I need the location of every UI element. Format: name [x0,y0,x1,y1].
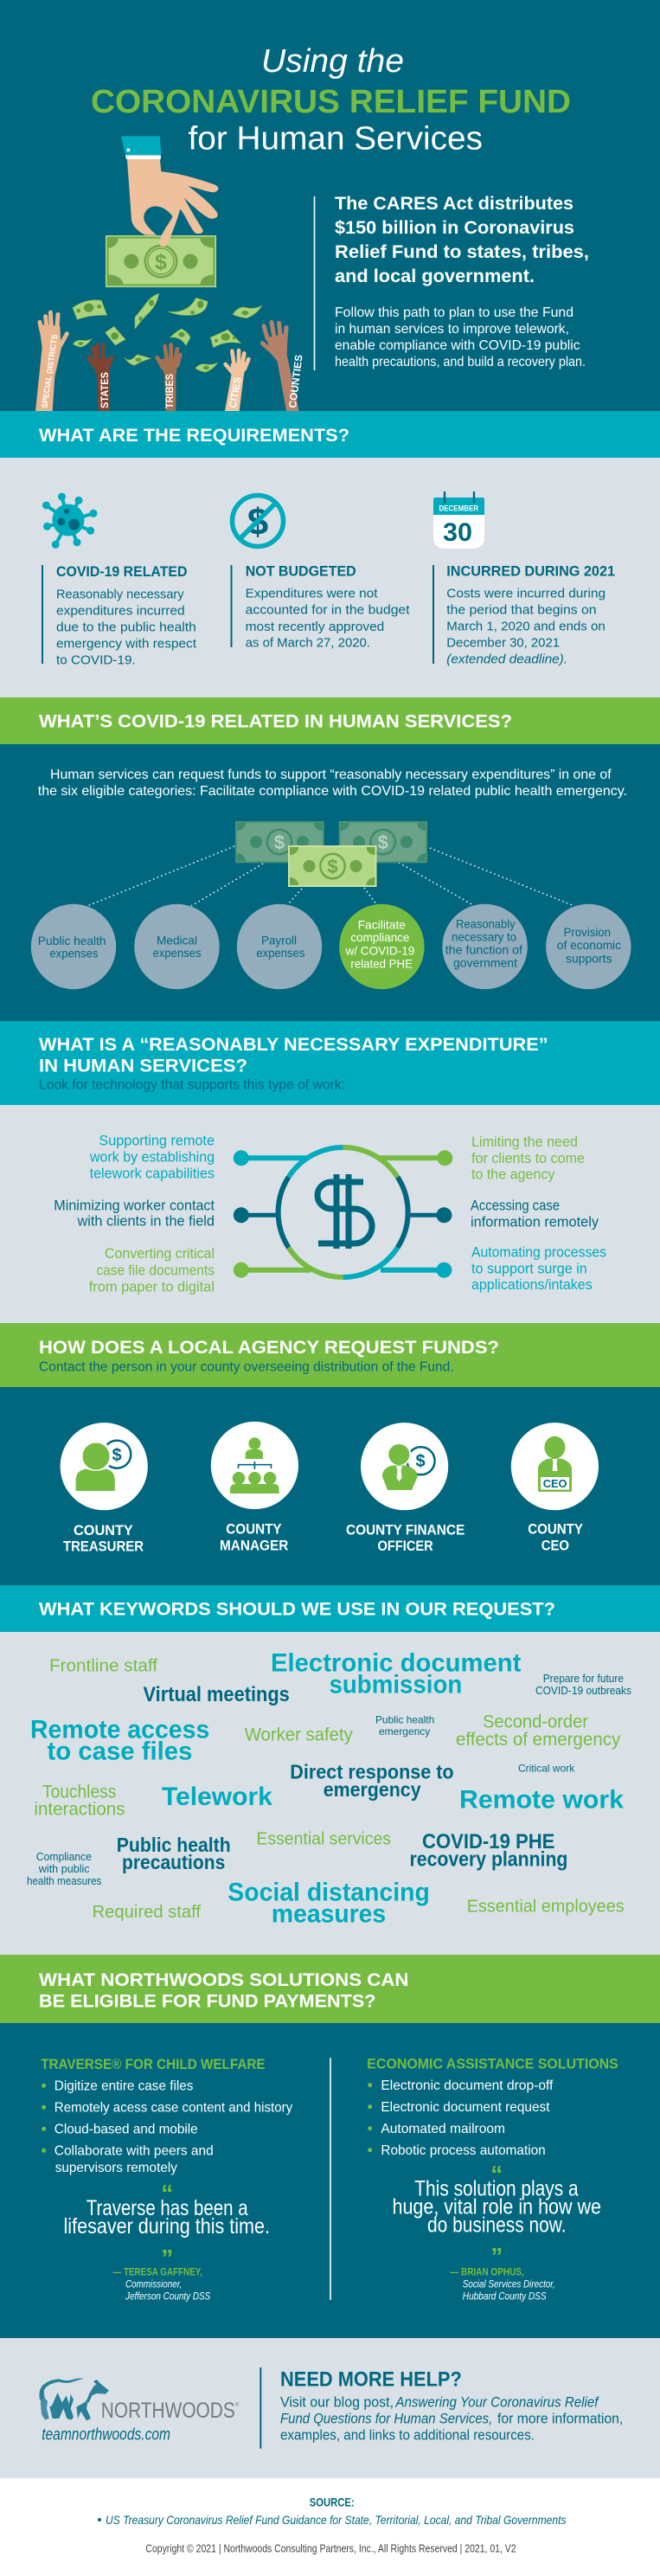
word cloud: Public health [375,1713,434,1725]
word cloud [27,1649,631,1929]
bill: center highlighted: $ [327,856,338,877]
title: CORONAVIRUS RELIEF FUND [91,84,571,120]
category: payroll expenses: Payroll [261,934,297,948]
requirement: covid-19 related: Reasonably necessary [56,588,184,602]
category: reasonably necessary: the function of [445,943,522,957]
icon: no dollar [232,495,284,547]
intro paragraph: Follow this path to plan to use the Fund [335,305,573,320]
word cloud: COVID-19 PHE [422,1830,554,1853]
icon: giving hand [121,136,218,247]
callout: need more help: for more information, [497,2411,623,2427]
hand: special districts [35,312,67,411]
intro paragraph: in human services to improve telework, [335,322,569,337]
quote: traverse: ” [161,2245,173,2271]
logo: northwoods: NORTHWOODS [101,2399,235,2423]
word cloud: Remote access [30,1715,209,1744]
hand: tribes: TRIBES [163,374,176,408]
word cloud: recovery planning [410,1848,567,1872]
icon: calendar: DECEMBER [439,504,478,513]
word cloud: COVID-19 outbreaks [535,1684,631,1697]
item: automating processes [471,1243,606,1293]
panel: hero [0,0,660,411]
category: reasonably necessary [442,904,528,989]
label: CEO [541,1538,569,1554]
callout: need more help: NEED MORE HELP? [280,2368,462,2392]
label: COUNTY [528,1521,584,1538]
requirement: incurred during 2021: INCURRED DURING 2021 [446,562,615,580]
word cloud: Second-order [483,1712,588,1732]
requirement: covid-19 related: due to the public health [56,620,196,635]
requirement: covid-19 related: COVID-19 RELATED [56,563,187,580]
category: reasonably necessary: necessary to [452,930,516,944]
hand: counties: COUNTIES [286,354,305,408]
bullet list: traverse: supervisors remotely [55,2161,177,2175]
word cloud: Worker safety [245,1725,353,1745]
word cloud: Social distancing [227,1879,430,1907]
requirement: not budgeted: accounted for in the budget [246,603,410,618]
icon: calendar: 30 [443,518,472,547]
logo: northwoods: ® [235,2402,240,2408]
item: converting case files: Converting critical [105,1245,215,1262]
requirement: covid-19 related: emergency with respect [56,637,197,652]
category: facilitate compliance highlighted: compliance [350,930,410,944]
word cloud: measures [272,1900,386,1929]
category: facilitate compliance highlighted: w/ COVID-19 [345,943,415,957]
item: minimizing worker contact: with clients in the field [77,1213,215,1230]
item: automating processes: applications/intakes [471,1276,593,1293]
hand: cities [225,350,248,411]
word cloud: interactions [34,1799,125,1819]
contact: county finance officer: $ [415,1452,426,1471]
panel: northwoods solutions [0,1955,660,2338]
label [63,1522,144,1555]
category: payroll expenses: expenses [256,946,304,960]
contact: county ceo [511,1423,599,1554]
bullet list: economic assistance [368,2078,554,2158]
word cloud: emergency [379,1725,430,1738]
word cloud: Remote work [459,1785,624,1814]
category: public health expenses: expenses [49,947,98,960]
category: economic supports: of economic [557,938,621,952]
quote: economic assistance: do business now. [427,2213,566,2238]
hand: cities: CITIES [227,376,244,409]
hand: states: STATES [99,372,111,408]
category: economic supports: supports [566,951,612,965]
item: accessing case information: Accessing case [471,1197,560,1213]
requirement: incurred during 2021: (extended deadline). [446,652,567,666]
heading: northwoods solutions [39,1970,409,2011]
panel: requesting funds [0,1323,660,1585]
category: economic supports [546,904,631,989]
heading: requirements: WHAT ARE THE REQUIREMENTS? [39,426,349,446]
bullet list: economic assistance: Robotic process automation [381,2143,546,2158]
attribution: teresa gaffney [112,2265,210,2302]
illustration: bill held by hand [106,136,218,287]
label: MANAGER [220,1538,288,1554]
word cloud: Virtual meetings [144,1683,290,1706]
item: supporting remote work: work by establishing [89,1149,215,1166]
attribution: teresa gaffney: Jefferson County DSS [125,2290,210,2302]
intro statement: and local government. [335,267,535,286]
word cloud: Compliance [36,1850,92,1863]
bullet list: traverse: Remotely acess case content and history [54,2101,292,2116]
attribution: teresa gaffney: Commissioner, [125,2277,182,2290]
bullet list: traverse: Digitize entire case files [54,2079,193,2094]
panel: reasonably necessary expenditure [0,1021,660,1323]
bullet list: economic assistance: Electronic document request [381,2100,550,2115]
requirement: incurred during 2021: March 1, 2020 and ends on [446,620,606,634]
word cloud: Required staff [93,1903,201,1922]
heading: requesting funds [39,1338,499,1374]
heading: requesting funds: HOW DOES A LOCAL AGENCY REQUEST FUNDS? [39,1338,499,1358]
icon: no dollar: $ [247,501,268,543]
category: facilitate compliance highlighted [339,904,425,989]
requirement: not budgeted [230,562,410,651]
label: OFFICER [377,1538,433,1554]
item: limiting the need: to the agency [471,1166,555,1183]
text: eligible categories intro: the six eligible categories: Facilitate compliance with COVID-19 related public health emergency. [38,784,627,799]
item: automating processes: Automating processes [471,1243,606,1260]
callout: need more help: Fund Questions for Human Services, [280,2411,492,2427]
attribution: brian ophus: Hubbard County DSS [463,2290,547,2302]
bill: right [339,821,427,863]
item: converting case files [89,1245,215,1294]
category: payroll expenses [237,904,322,989]
callout: need more help: Answering Your Coronavirus Relief [395,2394,600,2411]
contact: county manager [211,1422,298,1554]
source: SOURCE: [310,2496,355,2509]
quote: traverse: lifesaver during this time. [64,2214,270,2239]
category: facilitate compliance highlighted: related PHE [350,956,413,970]
panel: requirements [0,411,660,697]
intro statement: Relief Fund to states, tribes, [335,242,589,262]
illustration: reaching hands [35,312,305,411]
quote: traverse: “ [161,2180,173,2207]
category: public health expenses: Public health [38,934,106,948]
panel: keywords [0,1585,660,1955]
requirement: not budgeted: as of March 27, 2020. [246,636,370,651]
bill: right: $ [378,832,388,853]
item: limiting the need: Limiting the need [471,1134,578,1150]
contact: county ceo: CEO [543,1477,567,1490]
label [346,1521,465,1554]
illustration: falling bills [73,293,262,372]
dotted connectors [87,846,574,906]
panel: need more help [0,2338,660,2478]
label: COUNTY [74,1522,133,1539]
contact: county treasurer [61,1423,148,1555]
label: COUNTY FINANCE [346,1521,465,1538]
item: accessing case information [471,1197,599,1230]
word cloud: submission [329,1671,462,1699]
intro paragraph: health precautions, and build a recovery plan. [335,355,586,369]
item: accessing case information: information remotely [471,1214,599,1230]
icon: calendar [433,492,484,549]
title: Using the [261,43,404,80]
requirement: incurred during 2021: Costs were incurred during [446,587,606,601]
heading: reasonably necessary expenditure: WHAT IS A “REASONABLY NECESSARY EXPENDITURE” [39,1035,548,1055]
hand: counties [262,322,305,411]
word cloud: to case files [47,1737,192,1765]
heading: covid-19 related: WHAT’S COVID-19 RELATED IN HUMAN SERVICES? [39,712,512,732]
word cloud: Prepare for future [543,1672,624,1685]
intro statement: $150 billion in Coronavirus [335,218,574,238]
heading: reasonably necessary expenditure [39,1035,548,1092]
quote: economic assistance [393,2161,601,2270]
illustration: bill held by hand: $ [155,250,167,274]
item: limiting the need [471,1134,585,1183]
logo: northwoods [39,2379,240,2444]
requirement: covid-19 related: to COVID-19. [56,652,136,667]
bill: center highlighted [288,845,377,887]
column: economic assistance: ECONOMIC ASSISTANCE SOLUTIONS [367,2055,618,2072]
requirement: incurred during 2021: December 30, 2021 [446,636,560,651]
attribution: teresa gaffney: — TERESA GAFFNEY, [112,2265,202,2277]
heading: keywords: WHAT KEYWORDS SHOULD WE USE IN OUR REQUEST? [39,1600,555,1620]
category: reasonably necessary: Reasonably [456,917,516,931]
word cloud: Public health [117,1834,231,1856]
category: economic supports: Provision [564,925,611,939]
category: medical expenses: Medical [157,934,197,948]
item: converting case files: from paper to digital [89,1278,215,1294]
bullet list: traverse: Cloud-based and mobile [54,2123,198,2137]
panel: source footer [0,2478,660,2576]
word cloud: emergency [324,1778,421,1801]
quote: economic assistance: ” [490,2243,503,2270]
quote: traverse [64,2180,270,2271]
icon: virus [42,493,97,549]
word cloud: effects of emergency [456,1730,621,1750]
contact: county finance officer [346,1423,465,1554]
requirement: not budgeted: NOT BUDGETED [246,562,356,580]
copyright: Copyright © 2021 | Northwoods Consulting Partners, Inc., All Rights Reserved | 2021, 01, V2 [145,2542,516,2554]
text: eligible categories intro [38,768,627,799]
word cloud: Frontline staff [49,1657,157,1676]
attribution: brian ophus: Social Services Director, [463,2277,555,2290]
category: public health expenses [31,904,116,989]
word cloud: health measures [27,1874,102,1887]
intro paragraph: enable compliance with COVID-19 public [335,338,580,353]
bullet list: economic assistance: Electronic document drop-off [381,2078,554,2093]
text: eligible categories intro: Human services can request funds to support “reasonably necessary expenditures” in one of [50,768,612,782]
intro paragraph [335,305,586,369]
column: traverse: TRAVERSE® FOR CHILD WELFARE [41,2056,266,2072]
attribution: brian ophus [450,2265,555,2302]
panel: covid-19 related [0,697,660,1021]
quote: traverse: Traverse has been a [87,2196,248,2220]
label [220,1521,288,1554]
item: supporting remote work [89,1132,215,1182]
hand: states [89,344,112,411]
intro statement [335,194,589,286]
requirement: not budgeted: most recently approved [246,620,384,634]
category: medical expenses [134,904,220,989]
requirement: covid-19 related: expenditures incurred [56,604,185,619]
item: supporting remote work: telework capabilities [90,1166,215,1182]
column: traverse [41,2056,292,2302]
word cloud: with public [38,1862,90,1875]
callout: need more help: examples, and links to additional resources. [280,2427,535,2444]
source: US Treasury Coronavirus Relief Fund Guidance for State, Territorial, Local, and Tribal Governments [106,2513,566,2527]
word cloud: Essential services [256,1830,391,1849]
word cloud: Critical work [518,1762,575,1774]
quote: economic assistance: This solution plays a [414,2177,579,2201]
word cloud: Essential employees [467,1897,625,1916]
title [91,43,571,157]
word cloud: Telework [162,1783,272,1811]
heading: reasonably necessary expenditure: Look for technology that supports this type of work: [39,1077,345,1092]
quote: economic assistance: “ [490,2161,503,2187]
hand: tribes [157,344,180,411]
item: automating processes: to support surge in [471,1260,587,1276]
category: reasonably necessary: government [453,956,517,970]
item: converting case files: case file documents [96,1262,215,1278]
bullet list: economic assistance: Automated mailroom [381,2122,505,2136]
icon: large dollar [317,1174,372,1249]
requirement: not budgeted: Expenditures were not [246,587,378,601]
requirement: incurred during 2021 [433,562,615,666]
word cloud: Touchless [42,1782,116,1802]
title: for Human Services [189,121,483,157]
item: supporting remote work: Supporting remote [99,1132,215,1148]
item: limiting the need: for clients to come [471,1150,585,1166]
label: COUNTY [226,1521,282,1538]
logo: northwoods: teamnorthwoods.com [42,2425,170,2444]
bill: left [235,821,324,863]
label: TREASURER [63,1539,144,1555]
heading: northwoods solutions: BE ELIGIBLE FOR FUND PAYMENTS? [39,1991,375,2011]
requirement: incurred during 2021: the period that begins on [446,603,597,618]
bullet list: traverse: Collaborate with peers and [54,2144,214,2159]
intro statement: The CARES Act distributes [335,194,573,214]
item: minimizing worker contact: Minimizing worker contact [54,1197,215,1213]
bill: left: $ [274,832,285,853]
quote: economic assistance: huge, vital role in how we [393,2195,601,2219]
word cloud: precautions [122,1851,225,1873]
icon: bear [39,2379,109,2420]
item: minimizing worker contact [54,1197,215,1230]
callout: need more help: Visit our blog post, [280,2394,394,2411]
callout: need more help [280,2368,623,2444]
source [98,2496,566,2527]
contact: county treasurer: $ [112,1446,122,1465]
word cloud: Direct response to [290,1761,454,1783]
heading: requesting funds: Contact the person in your county overseeing distribution of the Fund. [39,1359,454,1374]
column: economic assistance [367,2055,618,2302]
attribution: brian ophus: — BRIAN OPHUS, [450,2265,524,2277]
hand: special districts: SPECIAL DISTRICTS [41,334,60,408]
category: medical expenses: expenses [153,946,202,960]
requirement: covid-19 related [42,563,197,667]
bullet list: traverse [42,2079,292,2175]
heading: reasonably necessary expenditure: IN HUMAN SERVICES? [39,1056,247,1076]
word cloud: Electronic document [271,1649,521,1678]
heading: northwoods solutions: WHAT NORTHWOODS SOLUTIONS CAN [39,1970,409,1990]
category: facilitate compliance highlighted: Facilitate [358,917,406,931]
diagram: dollar hub [234,1147,452,1278]
label [528,1521,584,1554]
